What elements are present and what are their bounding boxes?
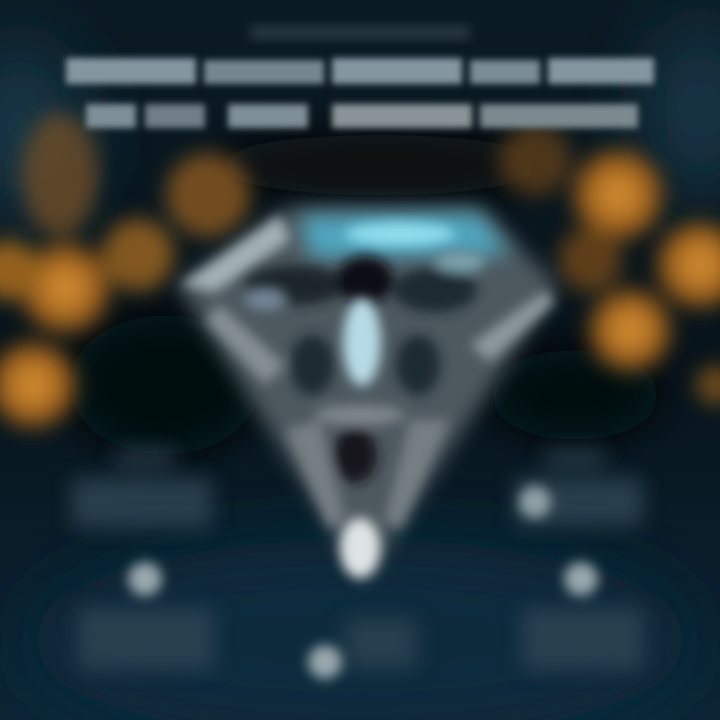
title block	[66, 26, 654, 128]
caption: upper right	[515, 450, 643, 526]
diamond body	[178, 207, 558, 580]
caption: lower left	[78, 608, 214, 670]
title main line	[66, 58, 654, 84]
icon: bottom centre dot	[308, 645, 342, 679]
caption: lower right	[522, 608, 644, 670]
diamond crown highlight	[300, 214, 510, 258]
orange bokeh lights: left	[0, 113, 250, 429]
title second line	[86, 104, 638, 128]
title small line	[250, 26, 470, 39]
caption: upper left	[72, 450, 212, 528]
diamond centre sparkle	[343, 298, 381, 386]
diamond graphic	[178, 207, 558, 580]
diamond tip sparkle	[340, 518, 380, 578]
orange bokeh lights: right	[499, 124, 720, 405]
icon: lower left dot	[128, 562, 162, 596]
caption: bottom centre	[345, 618, 417, 668]
diamond facets	[205, 252, 555, 530]
icon: lower right dot	[564, 562, 598, 596]
icon: upper right dot	[519, 486, 551, 518]
